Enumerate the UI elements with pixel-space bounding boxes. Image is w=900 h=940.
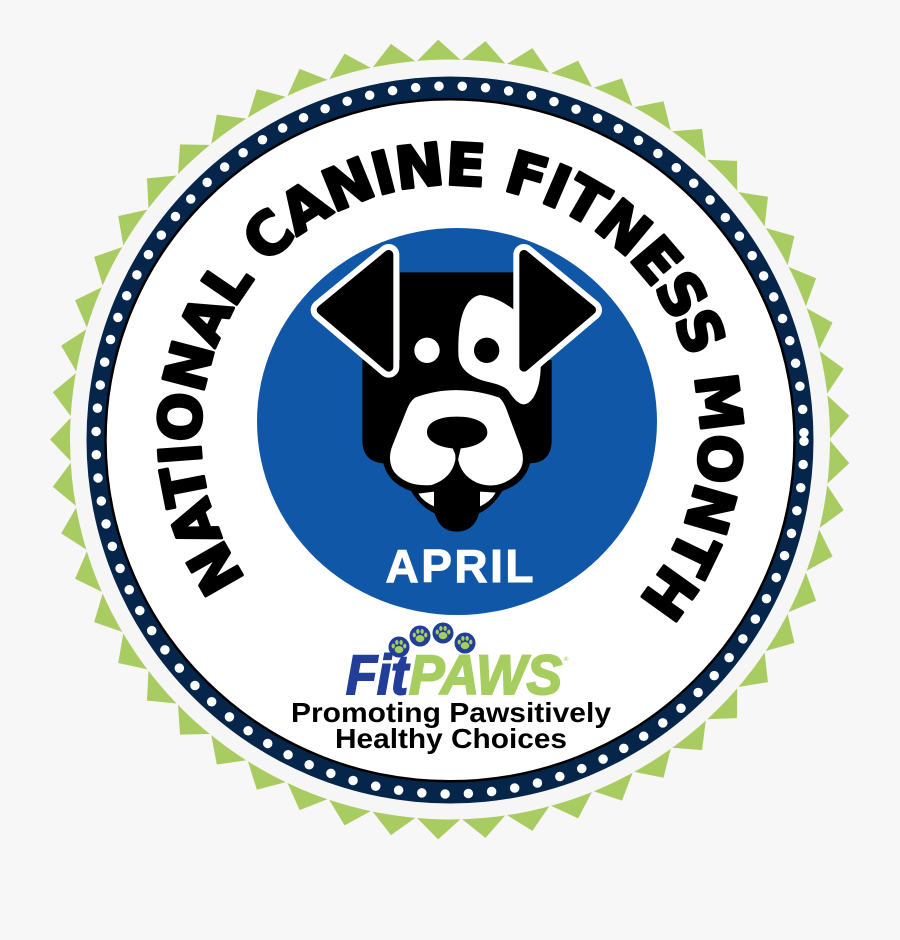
blue circle xyxy=(257,228,657,615)
right ear xyxy=(524,255,591,367)
white eye patch xyxy=(458,295,541,404)
registered mark: ® xyxy=(564,656,569,663)
white muzzle xyxy=(390,390,523,485)
left ear xyxy=(321,255,389,367)
tagline xyxy=(291,697,611,754)
tagline: Promoting Pawsitively xyxy=(291,697,611,728)
month label: APRIL xyxy=(386,540,534,592)
logo wordmark: Fit xyxy=(346,643,410,706)
paw print row xyxy=(388,622,476,658)
pale ring inside spikes xyxy=(70,60,830,820)
tagline: Healthy Choices xyxy=(335,723,567,754)
curved title: NATIONAL CANINE FITNESS MONTH xyxy=(156,140,745,623)
logo wordmark: PAWS xyxy=(409,643,562,706)
dog head silhouette xyxy=(362,272,552,532)
green spiked border xyxy=(50,39,851,840)
nose xyxy=(427,417,487,460)
navy dotted band xyxy=(86,76,814,804)
icon: dog head xyxy=(321,255,591,532)
FitPAWS logo xyxy=(346,622,569,706)
teeth xyxy=(418,492,496,506)
eyes xyxy=(414,338,499,363)
